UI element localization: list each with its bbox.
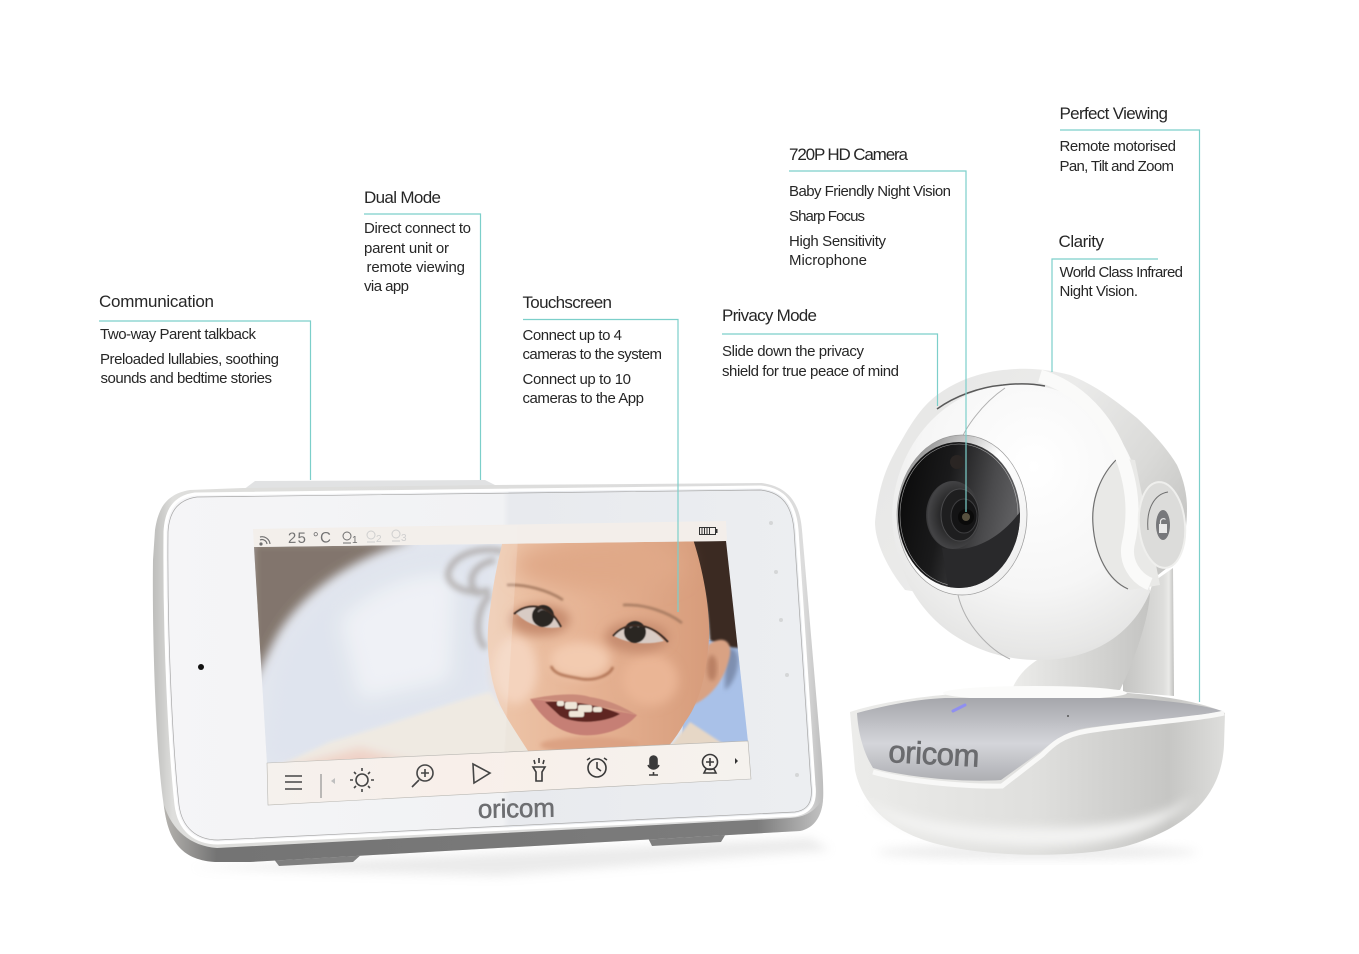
text: via app: [364, 278, 409, 295]
microphone hole: [1067, 715, 1069, 717]
line: touchscreen: [523, 320, 678, 612]
status icons: cameras: 1: [352, 535, 358, 546]
callout: 720P HD camera: [789, 145, 951, 269]
right eye: [613, 621, 668, 643]
blurred background: [254, 545, 412, 681]
heading: Touchscreen: [522, 293, 612, 312]
ear: [693, 640, 730, 705]
text: cameras to the App: [522, 390, 644, 407]
knob arrow: [1148, 492, 1168, 530]
monitor shadow: [190, 838, 830, 876]
mouth lips: [530, 699, 637, 735]
text: [1060, 264, 1183, 300]
face inner line: [168, 490, 811, 840]
glass reflection: [253, 525, 518, 805]
line: privacy mode: [722, 334, 938, 406]
video screen: [250, 521, 760, 805]
neck: [1013, 590, 1150, 690]
sensor: [950, 455, 964, 469]
white rim: [873, 713, 1224, 786]
base lower highlight: [865, 795, 1195, 846]
text: [722, 343, 899, 380]
line: dual mode: [364, 214, 480, 480]
teeth: [557, 701, 602, 717]
callout: communication: [99, 292, 279, 387]
text: Direct connect to: [364, 220, 471, 237]
text: [789, 183, 951, 269]
camera shadow: [877, 845, 1197, 859]
lens barrel: [926, 481, 980, 549]
left eye: [514, 605, 561, 628]
base body: [850, 690, 1225, 855]
lock knob: [1135, 480, 1189, 570]
icon: camera plus: [702, 754, 718, 773]
line: 720P camera: [789, 171, 966, 512]
hair right: [694, 541, 738, 650]
heading: 720P HD Camera: [789, 145, 909, 164]
text: Connect up to 4: [522, 327, 622, 344]
privacy shell: [875, 369, 1187, 620]
status led: [953, 705, 965, 711]
monitor front face: [165, 487, 814, 843]
mouth: [530, 694, 637, 735]
callout: clarity: [1058, 232, 1183, 300]
text: sounds and bedtime stories: [100, 370, 272, 387]
divider: [320, 774, 322, 798]
text: Baby Friendly Night Vision: [789, 183, 951, 200]
brows: [507, 585, 563, 600]
callout: touchscreen: [522, 293, 662, 407]
camera ball: [892, 384, 1150, 660]
hair curls left: [448, 550, 505, 648]
forehead tone: [516, 542, 606, 588]
text: Two-way Parent talkback: [100, 326, 256, 343]
text: parent unit or: [364, 240, 449, 257]
eye sockets: [510, 604, 570, 636]
lens ring: [897, 435, 1027, 595]
shell shadow slot: [937, 384, 1045, 409]
icon: zoom in: [412, 765, 433, 787]
scroll arrows: [331, 758, 738, 784]
camera unit: [850, 369, 1225, 859]
text: Remote motorised: [1060, 138, 1176, 155]
blue background right: [682, 640, 748, 742]
monitor parent unit: [153, 480, 830, 876]
face: [488, 542, 710, 751]
lens dark glass: [898, 442, 1020, 588]
text: World Class Infrared: [1060, 264, 1183, 281]
lens white inner line: [900, 444, 1018, 586]
text: Connect up to 10: [522, 371, 631, 388]
text: cameras to the system: [522, 346, 662, 363]
status bar: [253, 521, 727, 547]
heading: Dual Mode: [364, 188, 441, 207]
mouth inside: [545, 702, 620, 722]
white cap: [943, 686, 1127, 700]
camera logo: oricom: [888, 734, 980, 774]
text: [522, 327, 662, 407]
text: Preloaded lullabies, soothing: [100, 351, 279, 368]
text: [364, 220, 471, 295]
monitor outer frame: [153, 483, 823, 862]
sleeve right: [672, 722, 722, 744]
menu icons: [285, 754, 718, 792]
monitor logo: oricom: [478, 793, 555, 824]
side disc edge: [1093, 458, 1128, 589]
line: clarity: [1052, 259, 1158, 372]
reflection on photo: [250, 540, 518, 770]
heading: Perfect Viewing: [1060, 104, 1168, 123]
callout: privacy mode: [722, 306, 899, 380]
battery icon: [700, 528, 718, 534]
heading: Clarity: [1058, 232, 1104, 251]
text: High Sensitivity: [789, 233, 886, 250]
text: Slide down the privacy: [722, 343, 864, 360]
text: [100, 326, 279, 387]
temperature: 25 °C: [288, 529, 331, 547]
callout: dual mode: [364, 188, 471, 295]
lock icon: [1156, 510, 1170, 540]
status icons: cameras: 2: [376, 534, 382, 545]
baby photo: [250, 535, 760, 772]
icon: hamburger: [285, 776, 302, 789]
icon: alarm: [587, 758, 607, 777]
icon: torch: [533, 758, 545, 781]
line: communication: [99, 321, 310, 480]
silver panel: [857, 698, 1222, 781]
status icons: cameras: [343, 530, 407, 546]
text: [1060, 138, 1176, 175]
headband: [1040, 376, 1150, 584]
callout lines: [99, 130, 1200, 702]
blanket: [262, 552, 490, 765]
text: remote viewing: [366, 259, 465, 276]
heading: Communication: [99, 292, 214, 311]
ball seam: [958, 388, 1010, 659]
glass lower reflection: [948, 512, 1020, 588]
icon: microphone: [648, 756, 659, 775]
status icons: cameras: 3: [401, 533, 407, 544]
icon: sun: [350, 768, 374, 792]
callout: perfect viewing: [1060, 104, 1176, 175]
cheek highlights: [493, 636, 537, 704]
side disc: [1093, 458, 1160, 590]
text: Sharp Focus: [789, 208, 865, 225]
monitor feet: [273, 832, 727, 866]
text: Pan, Tilt and Zoom: [1060, 158, 1174, 175]
text: Microphone: [789, 252, 867, 269]
stand post: [1123, 568, 1174, 696]
monitor top button strip: [243, 480, 497, 490]
sleeve left: [290, 694, 528, 762]
front camera dot: [198, 664, 204, 670]
side touch dots: [769, 521, 799, 777]
heading: Privacy Mode: [722, 306, 817, 325]
status icon: signal: [260, 537, 270, 545]
icon: play: [473, 764, 490, 783]
nose: [550, 642, 610, 678]
line: perfect viewing: [1060, 130, 1200, 702]
monitor bottom band: [164, 798, 823, 862]
text: shield for true peace of mind: [722, 363, 899, 380]
touch menu bar: [267, 741, 751, 805]
text: Night Vision.: [1060, 283, 1138, 300]
